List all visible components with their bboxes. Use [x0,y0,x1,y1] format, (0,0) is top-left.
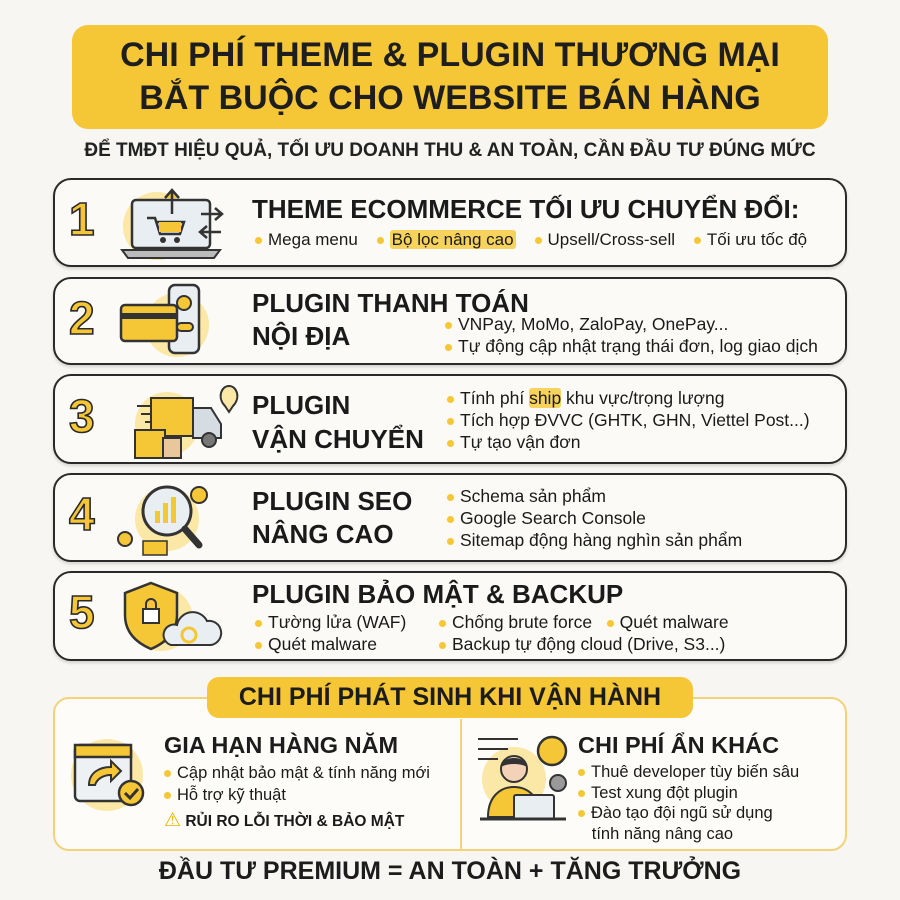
title: BẮT BUỘC CHO WEBSITE BÁN HÀNG [139,79,761,117]
panel: card 4 seo [53,473,847,562]
icon: card and phone [120,284,209,357]
heading: CHI PHÍ ẨN KHÁC [578,732,779,758]
heading: PLUGIN THANH TOÁN [252,288,529,318]
icon: truck [134,385,238,459]
footer tagline: ĐẦU TƯ PREMIUM = AN TOÀN + TĂNG TRƯỞNG [159,857,741,885]
bullets [164,764,430,804]
bullets: tính năng nâng cao [592,824,733,842]
warning: ⚠ RỦI RO LỖI THỜI & BẢO MẬT [164,810,404,831]
panel: card 5 security [53,571,847,661]
bullets right: Backup tự động cloud (Drive, S3...) [452,634,725,654]
bullets: Tự động cập nhật trạng thái đơn, log giao dịch [458,336,818,356]
title [72,25,828,129]
number 1: 1 [69,193,95,245]
icon: calendar [71,739,144,811]
bullets: Cập nhật bảo mật & tính năng mới [177,764,430,782]
panel: card 3 shipping [53,374,847,464]
heading: PLUGIN [252,390,350,420]
bullets [578,763,799,842]
panel: card 2 payment [53,277,847,365]
bullets: Test xung đột plugin [591,784,738,802]
heading [252,486,412,549]
bullets: Hỗ trợ kỹ thuật [177,786,286,804]
heading: NÂNG CAO [252,519,394,549]
bullets [447,486,742,550]
title: CHI PHÍ THEME & PLUGIN THƯƠNG MẠI [120,36,780,74]
bullets right: Chống brute force Quét malware [452,612,729,632]
bullets: Tích hợp ĐVVC (GHTK, GHN, Viettel Post...) [460,410,810,430]
bullets: Schema sản phẩm [460,486,606,506]
icon: shield cloud [124,582,222,651]
heading [252,288,529,351]
heading: PLUGIN BẢO MẬT & BACKUP [252,579,623,609]
icon: developer [478,736,568,820]
bullets: Quét malware [268,634,377,654]
number 2: 2 [69,292,95,344]
heading: THEME ECOMMERCE TỐI ƯU CHUYỂN ĐỔI: [252,194,799,224]
heading: GIA HẠN HÀNG NĂM [164,732,398,758]
number 5: 5 [69,586,95,638]
bullets: Mega menu Bộ lọc nâng cao Upsell/Cross-sell Tối ưu tốc độ [268,230,807,249]
section label pill [207,677,693,718]
icon: magnifier chart [117,486,208,556]
right: hidden costs [460,719,845,849]
icon: laptop cart [120,188,224,260]
bullets: Google Search Console [460,508,646,528]
heading: NỘI ĐỊA [252,321,350,351]
bullets: Tính phí ship khu vực/trọng lượng [460,388,724,408]
heading: VẬN CHUYỂN [252,424,424,454]
bullets: Tự tạo vận đơn [460,432,580,452]
bullets: Đào tạo đội ngũ sử dụng [591,804,773,822]
subtitle: ĐỂ TMĐT HIỆU QUẢ, TỐI ƯU DOANH THU & AN TOÀN, CẦN ĐẦU TƯ ĐÚNG MỨC [84,140,816,161]
bullets [255,612,406,654]
number 3: 3 [69,390,95,442]
panel: operating costs [53,697,847,851]
panel: card 1 theme [53,178,847,267]
section label pill: CHI PHÍ PHÁT SINH KHI VẬN HÀNH [239,683,661,711]
bullets right [439,612,729,654]
heading: PLUGIN SEO [252,486,412,516]
bullets: Tường lửa (WAF) [268,612,406,632]
heading [252,390,424,454]
bullets: Sitemap động hàng nghìn sản phẩm [460,530,742,550]
bullets [447,388,810,452]
number 4: 4 [69,488,95,540]
bullets: Thuê developer tùy biến sâu [591,763,799,781]
bullets: VNPay, MoMo, ZaloPay, OnePay... [458,314,728,334]
bullets [445,314,818,356]
left: annual renewal [71,732,430,831]
